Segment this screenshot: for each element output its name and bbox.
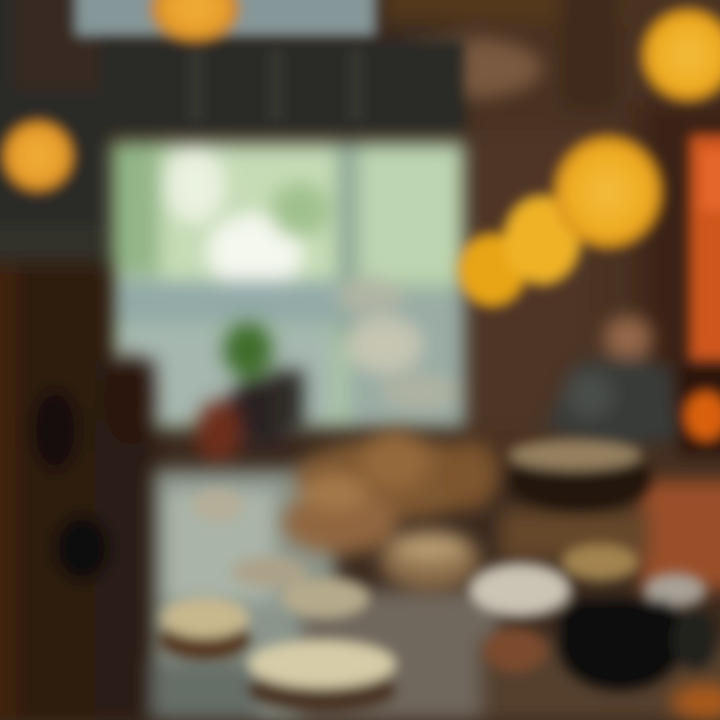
cluster of yellow lamps [458, 136, 662, 306]
right wall [460, 0, 720, 470]
top left dark wall [0, 0, 110, 270]
dark mug [483, 628, 547, 672]
ceiling: wooden beams at top right [385, 0, 625, 110]
window with greenery [112, 142, 465, 427]
dark window frame beams [100, 40, 465, 132]
dark bowl [508, 448, 652, 512]
plates and bowls [159, 440, 717, 712]
hanging lamp: left [2, 120, 74, 192]
potted plant on sill [196, 322, 304, 464]
food: pastries stacked in center [282, 430, 498, 590]
skylight strip at top [75, 0, 375, 36]
seated person in background [545, 316, 680, 450]
hanging lamp: top right [642, 9, 720, 101]
orange neon strip at right edge [680, 135, 720, 455]
cream bowl center [248, 668, 396, 712]
left foreground dark wooden post [0, 265, 156, 720]
hanging lamp: top center [151, 0, 239, 42]
table surface [150, 470, 720, 720]
right side wooden counter [500, 480, 720, 720]
white plate [470, 564, 570, 616]
cream bowl left [159, 620, 251, 660]
